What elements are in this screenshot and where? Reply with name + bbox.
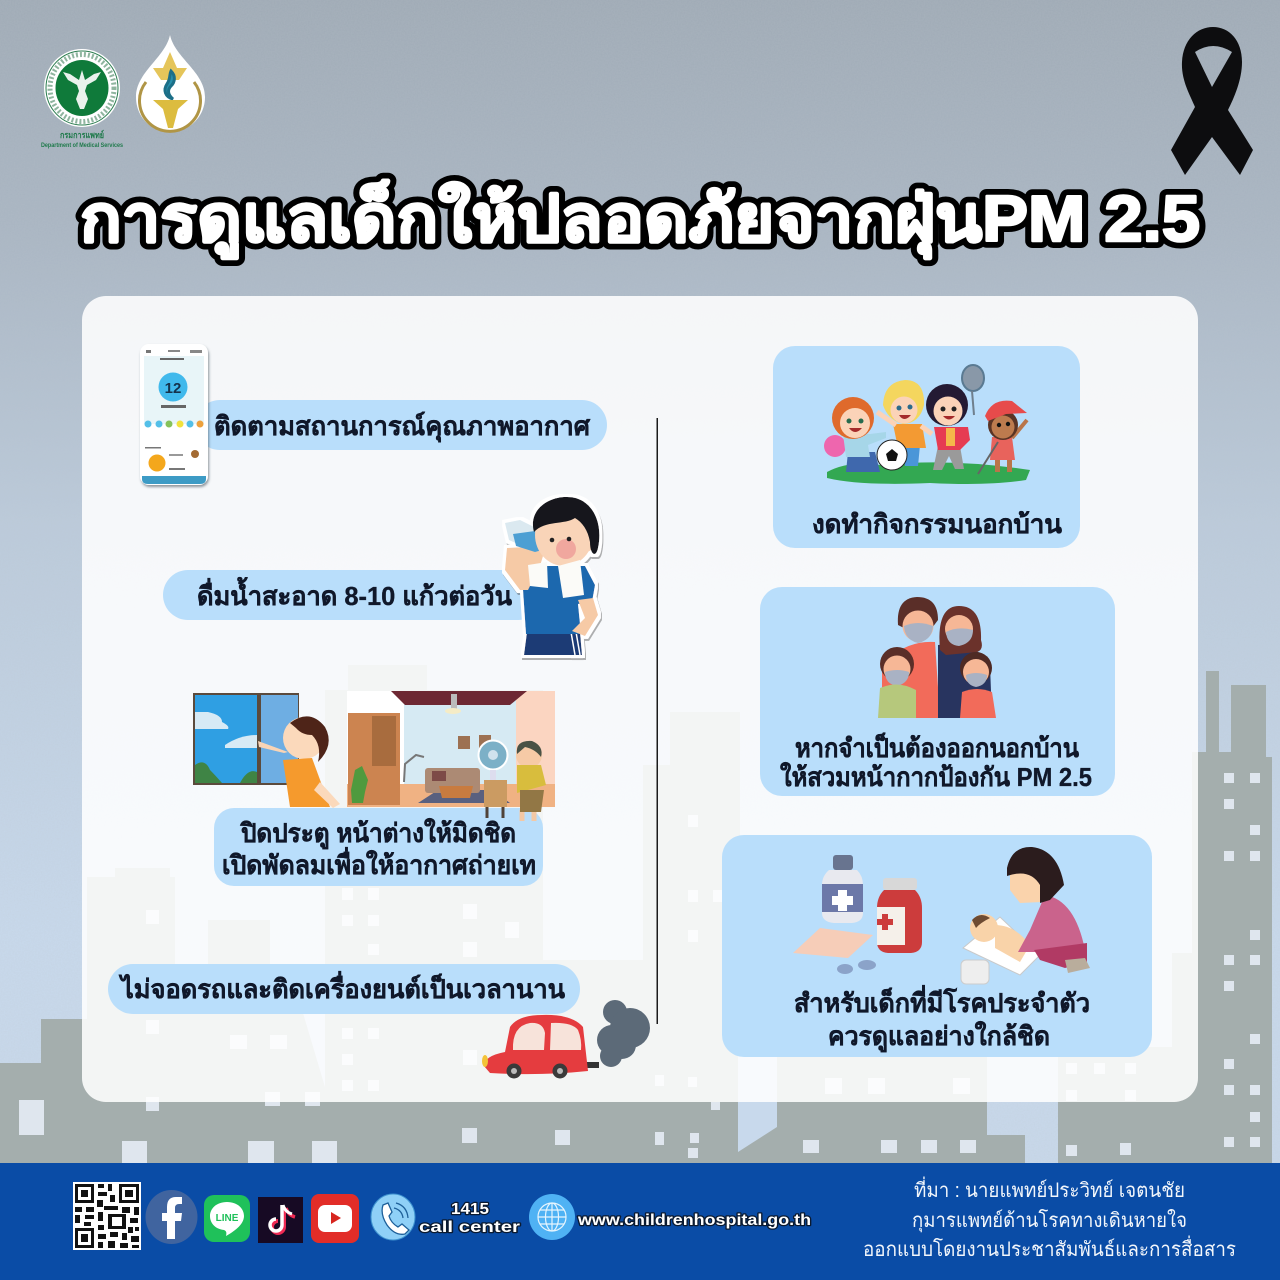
hotline text <box>419 1201 520 1236</box>
callout: monitor air quality <box>195 400 607 450</box>
source credit text: กุมารแพทย์ด้านโรคทางเดินหายใจ <box>912 1209 1187 1233</box>
hotline text: 1415 <box>451 1201 489 1218</box>
department name: กรมการแพทย์ <box>60 129 104 140</box>
illustration: mother caring for baby <box>961 847 1090 984</box>
divider <box>656 418 658 1024</box>
illustration: family wearing masks <box>878 597 996 718</box>
illustration: living room with fan <box>347 691 555 821</box>
callout: close doors and windows <box>214 808 543 886</box>
callout: drink clean water <box>163 570 543 620</box>
department name: Department of Medical Services <box>41 142 123 149</box>
card: wear a mask: หากจำเป็นต้องออกนอกบ้าน <box>795 732 1079 763</box>
website url: www.childrenhospital.go.th <box>577 1212 811 1229</box>
card: children with chronic disease: สำหรับเด็กที่มีโรคประจำตัว <box>794 984 1090 1018</box>
title: การดูแลเด็กให้ปลอดภัยจากฝุ่นPM 2.5 <box>80 180 1200 260</box>
icon: phone air quality app: 12 <box>165 380 181 397</box>
panel: main content <box>82 296 1198 1102</box>
source credit text: ที่มา : นายแพทย์ประวิทย์ เจตนชัย <box>914 1176 1185 1202</box>
logo: ministry of public health seal <box>41 49 123 149</box>
icon: phone call center <box>371 1194 415 1240</box>
icon: TikTok <box>258 1197 303 1243</box>
callout: close doors and windows: เปิดพัดลมเพื่อให้อากาศถ่ายเท <box>222 846 536 880</box>
card: wear a mask: ให้สวมหน้ากากป้องกัน PM 2.5 <box>780 762 1092 792</box>
illustration: boy drinking water <box>505 497 599 655</box>
icon: black mourning ribbon <box>1171 27 1253 175</box>
illustration: child closing window <box>193 693 340 808</box>
callout: do not idle car <box>108 964 580 1014</box>
card: children with chronic disease: ควรดูแลอย่างใกล้ชิด <box>828 1021 1050 1053</box>
card: avoid outdoor activity <box>773 346 1080 548</box>
icon: globe <box>529 1194 575 1240</box>
illustration: children playing <box>824 365 1030 484</box>
city skyline <box>0 665 1272 1170</box>
hotline text: call center <box>419 1219 520 1236</box>
logo: department of medical services drop <box>136 35 205 132</box>
department name <box>41 129 123 149</box>
icon: LINE: LINE <box>216 1213 239 1224</box>
source credit text <box>863 1176 1236 1261</box>
icon: facebook <box>146 1190 198 1244</box>
QR code <box>73 1182 141 1250</box>
icon: YouTube <box>311 1194 359 1243</box>
callout: do not idle car: ไม่จอดรถและติดเครื่องยนต์เป็นเวลานาน <box>118 970 565 1004</box>
icon: phone air quality app <box>140 344 208 485</box>
illustration: medicine bottles and pills <box>793 855 922 974</box>
callout: close doors and windows: ปิดประตู หน้าต่างให้มิดชิด <box>240 818 516 850</box>
callout: monitor air quality: ติดตามสถานการณ์คุณภาพอากาศ <box>214 411 590 443</box>
card: avoid outdoor activity: งดทำกิจกรรมนอกบ้าน <box>812 509 1062 539</box>
footer band <box>0 1163 1280 1280</box>
card: children with chronic disease <box>722 835 1152 1057</box>
callout: drink clean water: ดื่มน้ำสะอาด 8-10 แก้วต่อวัน <box>197 576 512 611</box>
source credit text: ออกแบบโดยงานประชาสัมพันธ์และการสื่อสาร <box>863 1235 1236 1261</box>
title: การดูแลเด็กให้ปลอดภัยจากฝุ่นPM 2.5 <box>80 180 1200 260</box>
icon: LINE <box>204 1195 250 1242</box>
card: wear a mask <box>760 587 1115 796</box>
illustration: car with exhaust smoke <box>482 1000 650 1078</box>
